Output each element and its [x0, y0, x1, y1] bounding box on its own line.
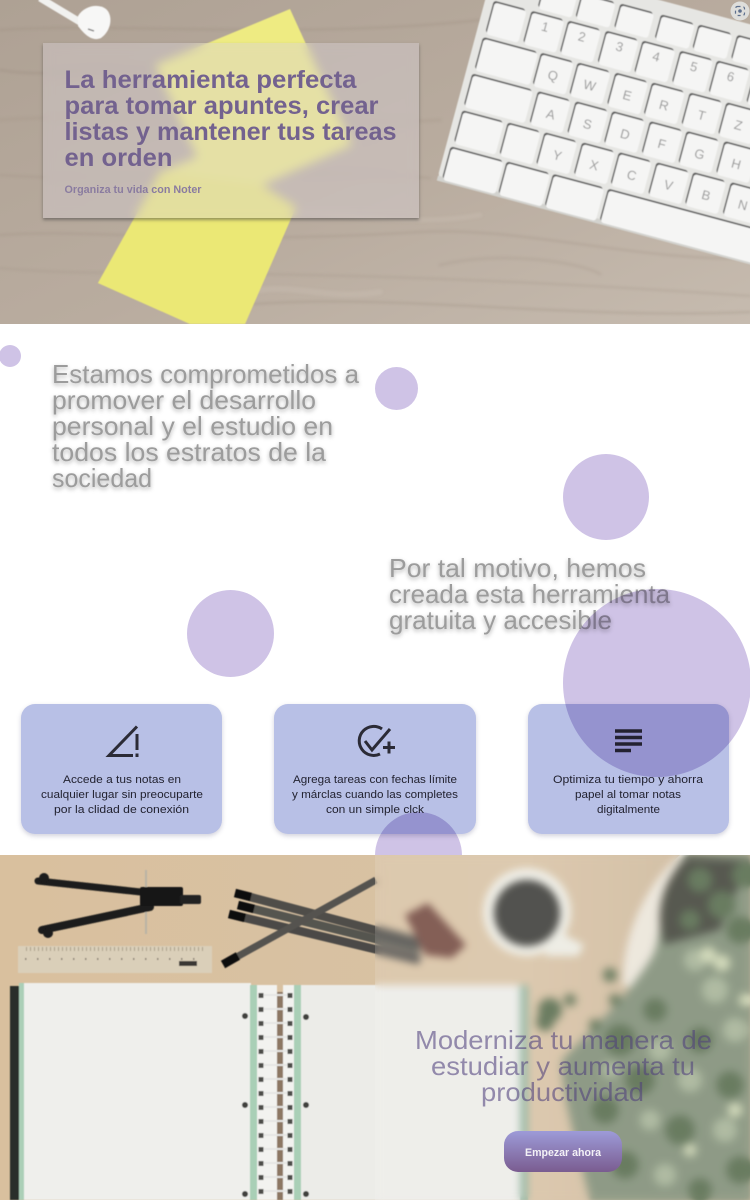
feature card 2: tasks	[274, 704, 476, 834]
card 3 icon and text	[553, 729, 704, 816]
icon: ruler	[18, 946, 212, 973]
icon: keyboard: Z	[733, 117, 744, 133]
icon: earphone	[40, 0, 110, 39]
icon: keyboard: 1	[540, 19, 551, 35]
card 2 icon and text: y márclas cuando las completes	[292, 789, 459, 801]
statement text: commitment: Estamos comprometidos a	[52, 359, 360, 389]
decorative circle: centre left	[187, 590, 274, 677]
icon: keyboard: A	[545, 106, 557, 123]
title text: para tomar apuntes, crear	[64, 92, 378, 120]
closing message: estudiar y aumenta tu	[431, 1051, 695, 1081]
title text: en orden	[64, 144, 172, 172]
feature card 3: save time and paper	[528, 704, 729, 834]
icon: keyboard: T	[696, 107, 707, 124]
card 3 icon and text: Optimiza tu tiempo y ahorra	[553, 774, 704, 786]
button: start now: Empezar ahora	[525, 1147, 602, 1159]
card 1 icon and text: Accede a tus notas en	[63, 774, 181, 786]
card 2 icon and text	[292, 724, 459, 816]
icon: keyboard: X	[588, 157, 600, 174]
icon: keyboard: 3	[614, 39, 625, 55]
card 3 icon and text: papel al tomar notas	[575, 789, 682, 801]
title text: Organiza tu vida con Noter	[64, 184, 202, 196]
title text: La herramienta perfecta	[64, 66, 357, 94]
decorative circle: lower middle, overlapping card	[375, 812, 462, 899]
feature card 1: offline access	[21, 704, 222, 834]
closing message: Moderniza tu manera de	[415, 1025, 712, 1055]
icon: eraser	[405, 903, 466, 958]
icon: keyboard: S	[581, 116, 594, 133]
bottom photo: desk with notebook, compass, pencils, coffee and plant	[0, 855, 750, 1200]
icon: keyboard: D	[619, 126, 632, 143]
icon: keyboard: B	[700, 187, 712, 204]
decorative circle: small left	[0, 345, 21, 367]
icon: keyboard: G	[693, 146, 706, 163]
icon: keyboard: V	[662, 177, 675, 194]
icon: plant	[536, 855, 750, 1200]
statement text: free tool	[388, 553, 671, 638]
icon: keyboard: Y	[551, 147, 564, 164]
icon: keyboard	[437, 0, 750, 315]
icon: keyboard: Q	[546, 67, 560, 84]
icon: keyboard: W	[582, 76, 598, 94]
card 1 icon and text: por la clidad de conexión	[54, 804, 189, 816]
card 1 icon and text: cualquier lugar sin preocuparte	[41, 789, 203, 801]
card 2 icon and text: Agrega tareas con fechas límite	[293, 774, 457, 786]
icon: compass	[38, 870, 201, 938]
statement text: commitment: personal y el estudio en	[52, 411, 333, 441]
hero photo: desk with keyboard, earphone and sticky notes	[0, 0, 750, 324]
hero panel: frosted box with title	[42, 43, 418, 218]
icon: keyboard: 5	[689, 59, 699, 75]
decorative circle: near first statement	[375, 367, 418, 410]
icon: image search button	[730, 2, 750, 20]
icon: open notebook	[10, 983, 528, 1200]
button: start now	[504, 1131, 622, 1172]
icon: plant pot	[623, 855, 690, 995]
icon: keyboard: E	[621, 87, 634, 104]
decorative circle: upper right	[563, 454, 649, 540]
statement text: commitment: promover el desarrollo	[52, 385, 316, 415]
statement text: free tool: Por tal motivo, hemos	[389, 553, 646, 583]
icon: keyboard: 2	[576, 28, 587, 45]
statement text: commitment: todos los estratos de la	[52, 437, 327, 467]
icon: sticky notes	[98, 9, 352, 324]
blurred right half of the photo	[375, 855, 750, 1200]
statement text: free tool: creada esta herramienta	[389, 579, 671, 609]
closing message	[415, 1025, 712, 1172]
icon: keyboard: N	[736, 197, 749, 214]
icon: coffee cup	[483, 868, 584, 956]
statement text: commitment: sociedad	[52, 463, 152, 493]
card 2 icon and text: con un simple clck	[326, 804, 425, 816]
closing message: productividad	[481, 1077, 644, 1107]
title text	[64, 66, 396, 196]
card 1 icon and text	[41, 726, 203, 816]
icon: keyboard: 6	[725, 68, 736, 85]
icon: pencils	[223, 880, 420, 964]
card 3 icon and text: digitalmente	[597, 804, 660, 816]
icon: keyboard: C	[625, 167, 638, 184]
icon: keyboard: H	[730, 155, 743, 172]
icon: keyboard: 4	[651, 48, 662, 65]
statement text: commitment	[51, 359, 360, 493]
icon: keyboard: F	[656, 136, 668, 152]
statement text: free tool: gratuita y accesible	[389, 605, 612, 635]
title text: listas y mantener tus tareas	[64, 118, 396, 146]
icon: keyboard: R	[657, 97, 670, 114]
decorative circle: large right, overlapping card	[563, 589, 750, 777]
